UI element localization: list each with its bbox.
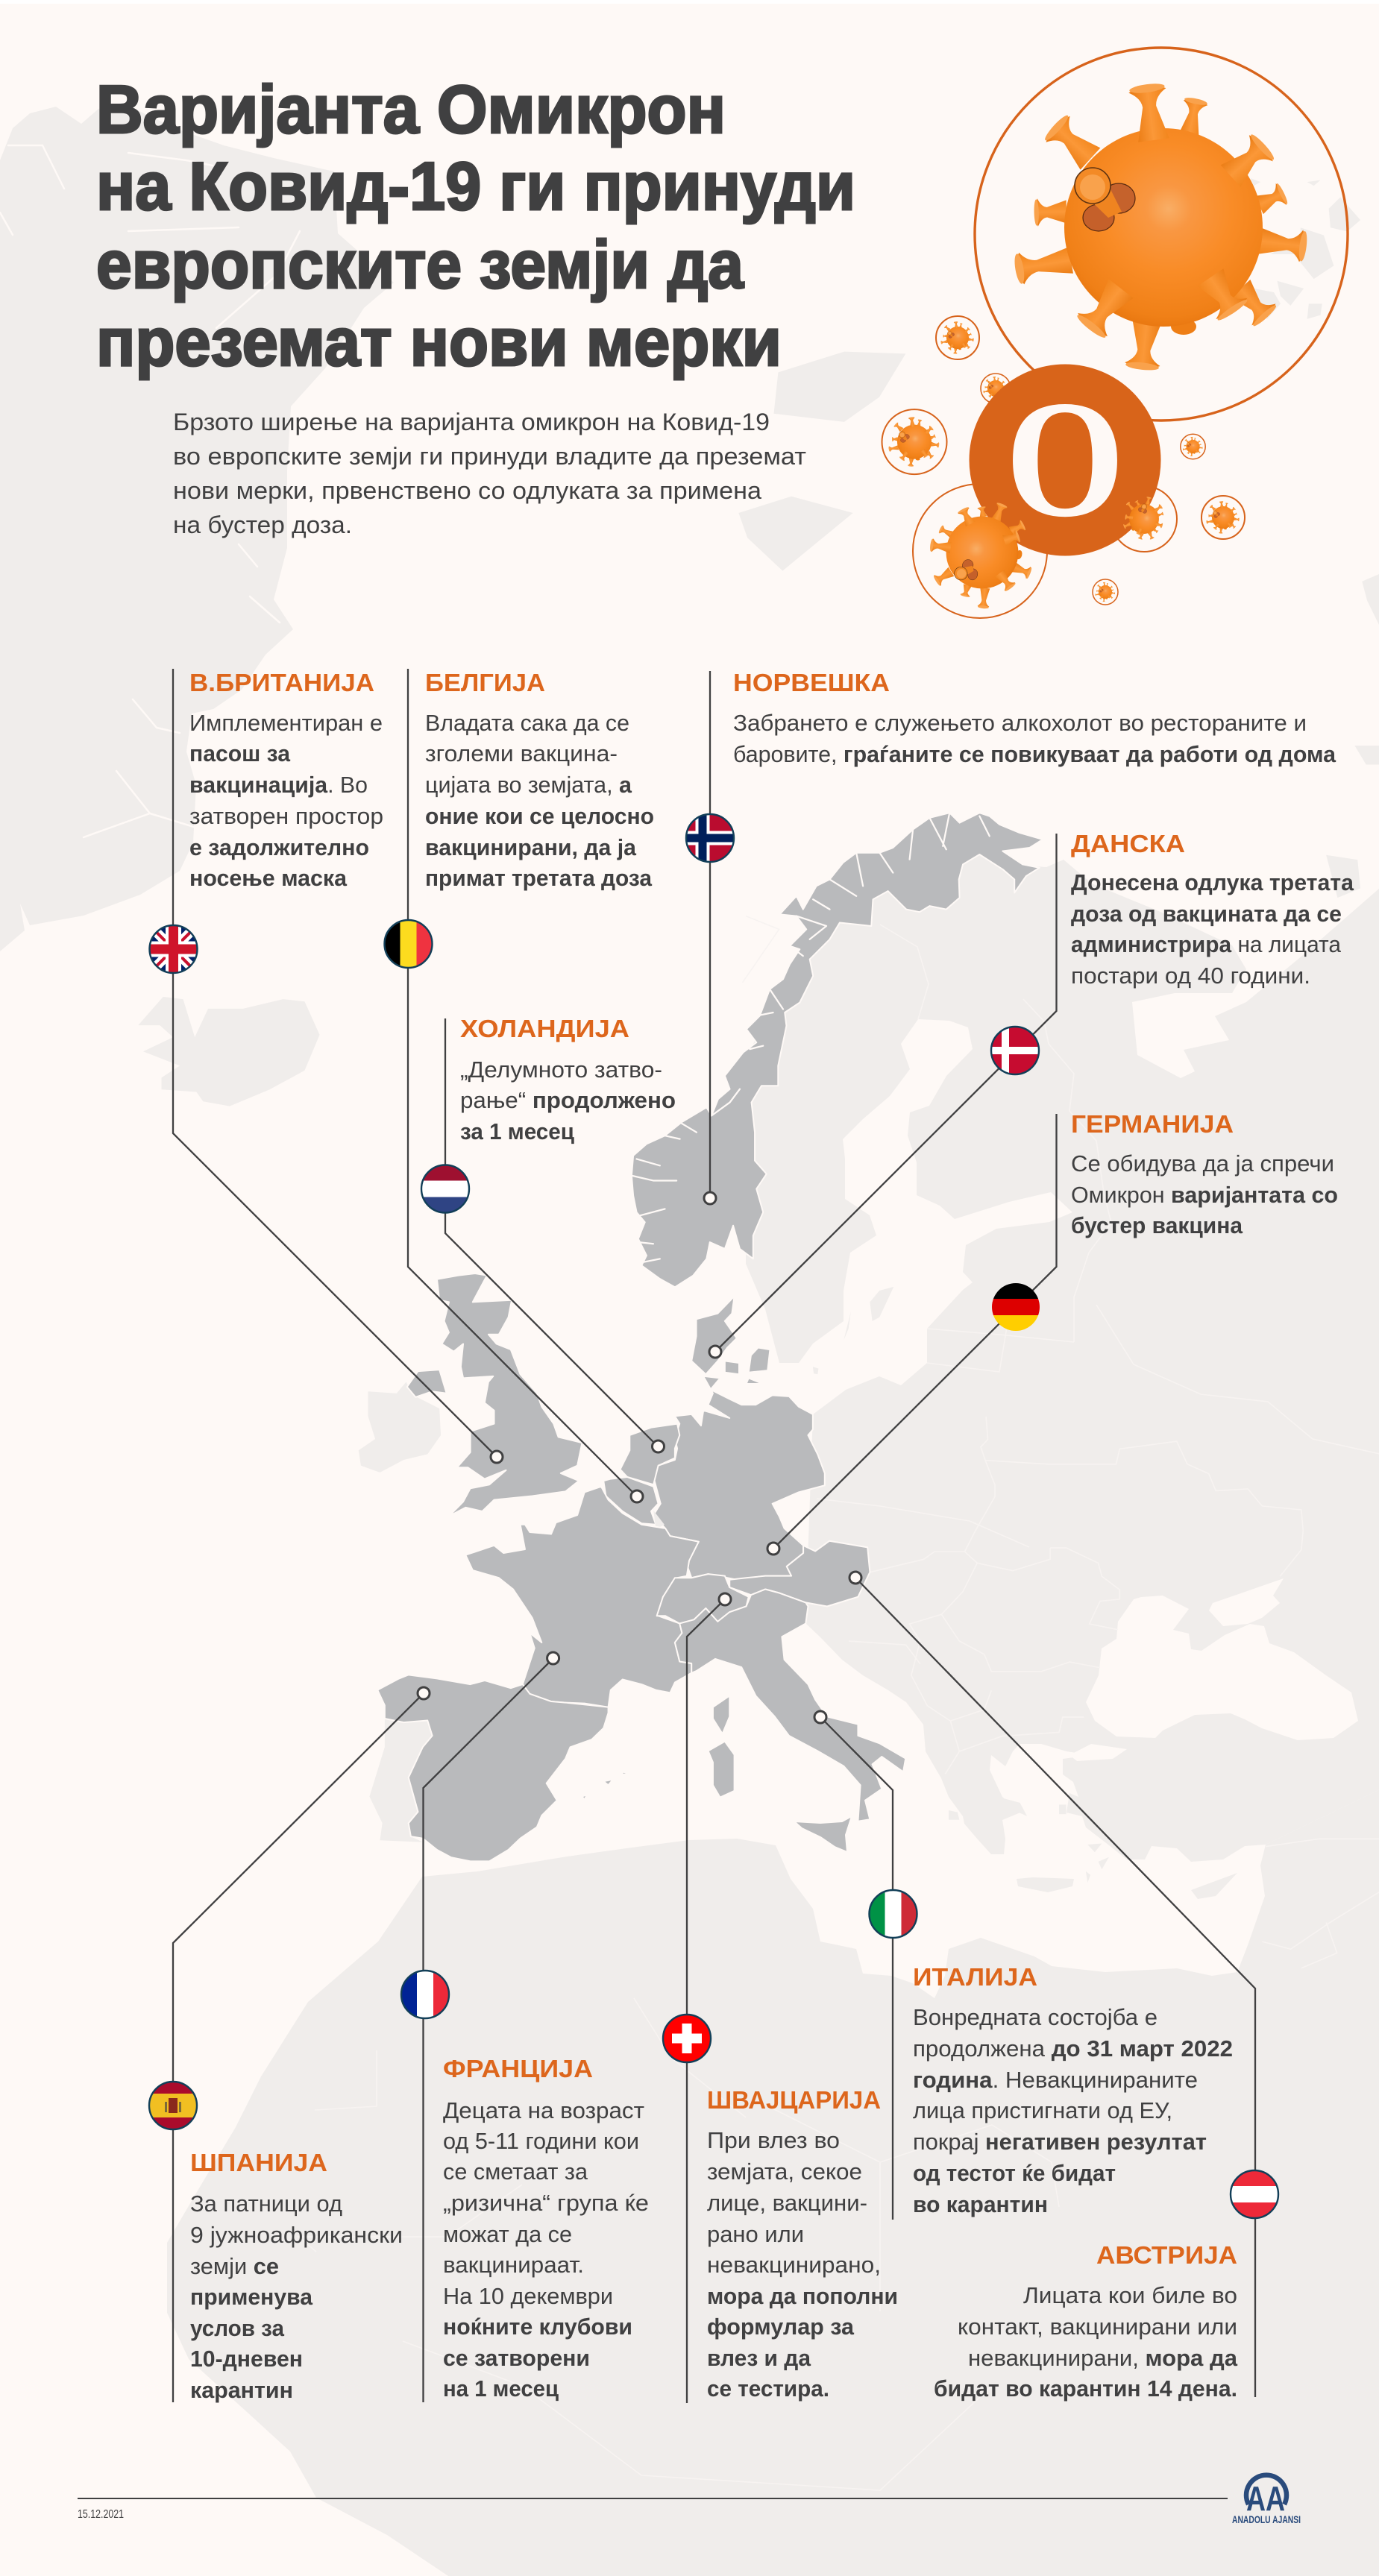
panel: Germany xyxy=(1071,1110,1338,1238)
body text: продолжена до 31 март 2022 xyxy=(913,2035,1233,2062)
body text: примат третата доза xyxy=(425,865,653,891)
body text: година. Невакцинираните xyxy=(913,2067,1198,2093)
body text: Децата на возраст xyxy=(443,2097,644,2123)
flag: Norway xyxy=(685,813,735,863)
panel: France xyxy=(443,2055,649,2402)
body text: Донесена одлука третата xyxy=(1071,869,1354,895)
panel: Switzerland xyxy=(707,2086,898,2402)
body text: Владата сака да се xyxy=(425,710,629,736)
flag: United Kingdom xyxy=(149,925,198,974)
heading: ХОЛАНДИЈА xyxy=(460,1015,629,1042)
small virus circles xyxy=(882,316,1245,618)
body text: услов за xyxy=(190,2315,285,2341)
body text xyxy=(733,710,1336,767)
body text: бидат во карантин 14 дена. xyxy=(934,2375,1237,2402)
body text: покрај негативен резултат xyxy=(913,2129,1207,2155)
body text: на 1 месец xyxy=(443,2375,559,2402)
body text: цијата во земјата, а xyxy=(425,772,632,798)
body text: од тестот ќе бидат xyxy=(913,2160,1116,2186)
body text: применува xyxy=(190,2284,313,2310)
title xyxy=(96,72,855,380)
intro text xyxy=(173,409,806,538)
body text: „Делумното затво- xyxy=(460,1056,662,1083)
body text: во карантин xyxy=(913,2191,1048,2217)
flag: Switzerland xyxy=(662,2014,712,2063)
panel: United Kingdom xyxy=(189,669,383,891)
body text: ноќните клубови xyxy=(443,2314,632,2340)
panel: Netherlands xyxy=(460,1015,676,1144)
body text: На 10 декември xyxy=(443,2283,613,2309)
body text: контакт, вакцинирани или xyxy=(958,2314,1237,2340)
intro text: на бустер доза. xyxy=(173,511,352,538)
body text: зголеми вакцина- xyxy=(425,740,618,766)
body text: За патници од xyxy=(190,2191,342,2217)
body text xyxy=(189,710,383,891)
body text xyxy=(707,2127,898,2402)
body text: карантин xyxy=(190,2377,293,2403)
flag: Belgium xyxy=(383,919,433,969)
body text: од 5-11 години кои xyxy=(443,2128,639,2154)
panel: Austria xyxy=(934,2241,1238,2402)
country group: UK, Denmark, Germany, Benelux, France, Switzerland, Austria, Italy, Spain xyxy=(377,1273,905,1861)
body text: лица пристигнати од ЕУ, xyxy=(913,2097,1172,2123)
panel: Norway xyxy=(733,669,1336,767)
flag: Denmark xyxy=(990,1026,1040,1075)
flag: Italy xyxy=(868,1889,917,1939)
footer rule xyxy=(78,2498,1228,2499)
body text: се затворени xyxy=(443,2345,590,2371)
body text xyxy=(1071,1150,1338,1238)
body text xyxy=(425,710,654,891)
body text: за 1 месец xyxy=(460,1118,574,1144)
map: highlighted European countries xyxy=(377,813,1043,1861)
illustration: omicron virus and letter badge xyxy=(882,48,1348,619)
flag: Austria xyxy=(1230,2170,1279,2219)
body text xyxy=(190,2191,403,2403)
flag: Netherlands xyxy=(421,1165,470,1214)
body text: невакцинирано, xyxy=(707,2252,881,2278)
body text: Се обидува да ја спречи xyxy=(1071,1150,1334,1177)
heading: АВСТРИЈА xyxy=(1096,2241,1237,2269)
body text: носење маска xyxy=(189,865,348,891)
body text: Омикрон варијантата со xyxy=(1071,1182,1338,1208)
panel: Italy xyxy=(913,1963,1233,2217)
logo: Anadolu Ajansi xyxy=(1232,2475,1301,2525)
country: Norway xyxy=(632,813,1043,1287)
heading: ШПАНИЈА xyxy=(190,2149,327,2176)
heading: БЕЛГИЈА xyxy=(425,669,545,696)
intro text: во европските земји ги принуди владите да преземат xyxy=(173,443,806,470)
body text: мора да пополни xyxy=(707,2283,898,2309)
body text: При влез во xyxy=(707,2127,840,2153)
large virus xyxy=(1013,82,1308,371)
body text xyxy=(913,2004,1233,2217)
heading: ИТАЛИЈА xyxy=(913,1963,1037,1991)
body text: невакцинирани, мора да xyxy=(968,2345,1238,2371)
body text xyxy=(460,1056,676,1144)
body text: вакцинирани, да ја xyxy=(425,834,637,860)
body text: земји се xyxy=(190,2253,279,2279)
body text: вакцинација. Во xyxy=(189,772,368,798)
country: Sicily xyxy=(794,1816,852,1852)
body text: доза од вакцината да се xyxy=(1071,901,1342,927)
body text: Имплементиран е xyxy=(189,710,383,736)
body text: постари од 40 години. xyxy=(1071,963,1310,989)
body text: Вонредната состојба е xyxy=(913,2004,1157,2030)
title: на Ковид-19 ги принуди xyxy=(96,149,855,224)
body text: влез и да xyxy=(707,2345,811,2371)
body text: земјата, секое xyxy=(707,2158,862,2185)
intro text: Брзото ширење на варијанта омикрон на Ковид-19 xyxy=(173,409,770,435)
flag: France xyxy=(400,1970,450,2019)
body text: оние кои се целосно xyxy=(425,803,654,829)
panel: Spain xyxy=(190,2149,403,2403)
body text: бустер вакцина xyxy=(1071,1212,1243,1238)
body text: вакцинираат. xyxy=(443,2252,584,2278)
body text: лице, вакцини- xyxy=(707,2190,867,2216)
body text: можат да се xyxy=(443,2221,572,2247)
body text: пасош за xyxy=(189,740,291,766)
body text xyxy=(443,2097,649,2402)
title: преземат нови мерки xyxy=(96,305,782,380)
logo: Anadolu Ajansi: ANADOLU AJANSI xyxy=(1232,2513,1301,2525)
body text: се сметаат за xyxy=(443,2158,588,2185)
title: европските земји да xyxy=(96,227,744,303)
omicron badge: O xyxy=(1005,365,1125,552)
intro text: нови мерки, првенствено со одлуката за примена xyxy=(173,477,761,504)
flag: Germany xyxy=(991,1282,1040,1332)
heading: В.БРИТАНИЈА xyxy=(189,669,374,696)
heading: ДАНСКА xyxy=(1071,830,1185,857)
panel: Belgium xyxy=(425,669,654,891)
body text: рано или xyxy=(707,2221,804,2247)
omicron badge xyxy=(970,364,1160,556)
body text: рање“ продолжено xyxy=(460,1087,676,1113)
body text xyxy=(934,2282,1238,2402)
panel: Denmark xyxy=(1071,830,1354,989)
title: Варијанта Омикрон xyxy=(96,72,726,148)
body text: баровите, граѓаните се повикуваат да работи од дома xyxy=(733,741,1336,767)
heading: ГЕРМАНИЈА xyxy=(1071,1110,1234,1138)
body text: формулар за xyxy=(707,2314,855,2340)
date: 15.12.2021 xyxy=(78,2508,124,2521)
logo: Anadolu Ajansi: AA xyxy=(1246,2479,1285,2518)
body text: се тестира. xyxy=(707,2375,829,2402)
flag: Spain xyxy=(148,2081,198,2130)
leader lines xyxy=(173,669,1255,2403)
small virus over badge, lower left xyxy=(917,488,1046,619)
body text: администрира на лицата xyxy=(1071,931,1342,957)
heading: ФРАНЦИЈА xyxy=(443,2055,593,2082)
small virus over badge, lower right xyxy=(1114,488,1174,549)
body text: Забрането е служењето алкохолот во рестораните и xyxy=(733,710,1307,736)
body text: 9 јужноафрикански xyxy=(190,2222,403,2248)
body text: „ризична“ група ќе xyxy=(443,2190,649,2216)
body text: 10-дневен xyxy=(190,2346,303,2372)
body text: Лицата кои биле во xyxy=(1023,2282,1237,2308)
location dots xyxy=(418,1192,861,1723)
body text xyxy=(1071,869,1354,989)
body text: е задолжително xyxy=(189,834,369,860)
body text: затворен простор xyxy=(189,803,383,829)
heading: ШВАЈЦАРИЈА xyxy=(707,2086,881,2114)
heading: НОРВЕШКА xyxy=(733,669,890,696)
large virus circle xyxy=(975,48,1348,421)
